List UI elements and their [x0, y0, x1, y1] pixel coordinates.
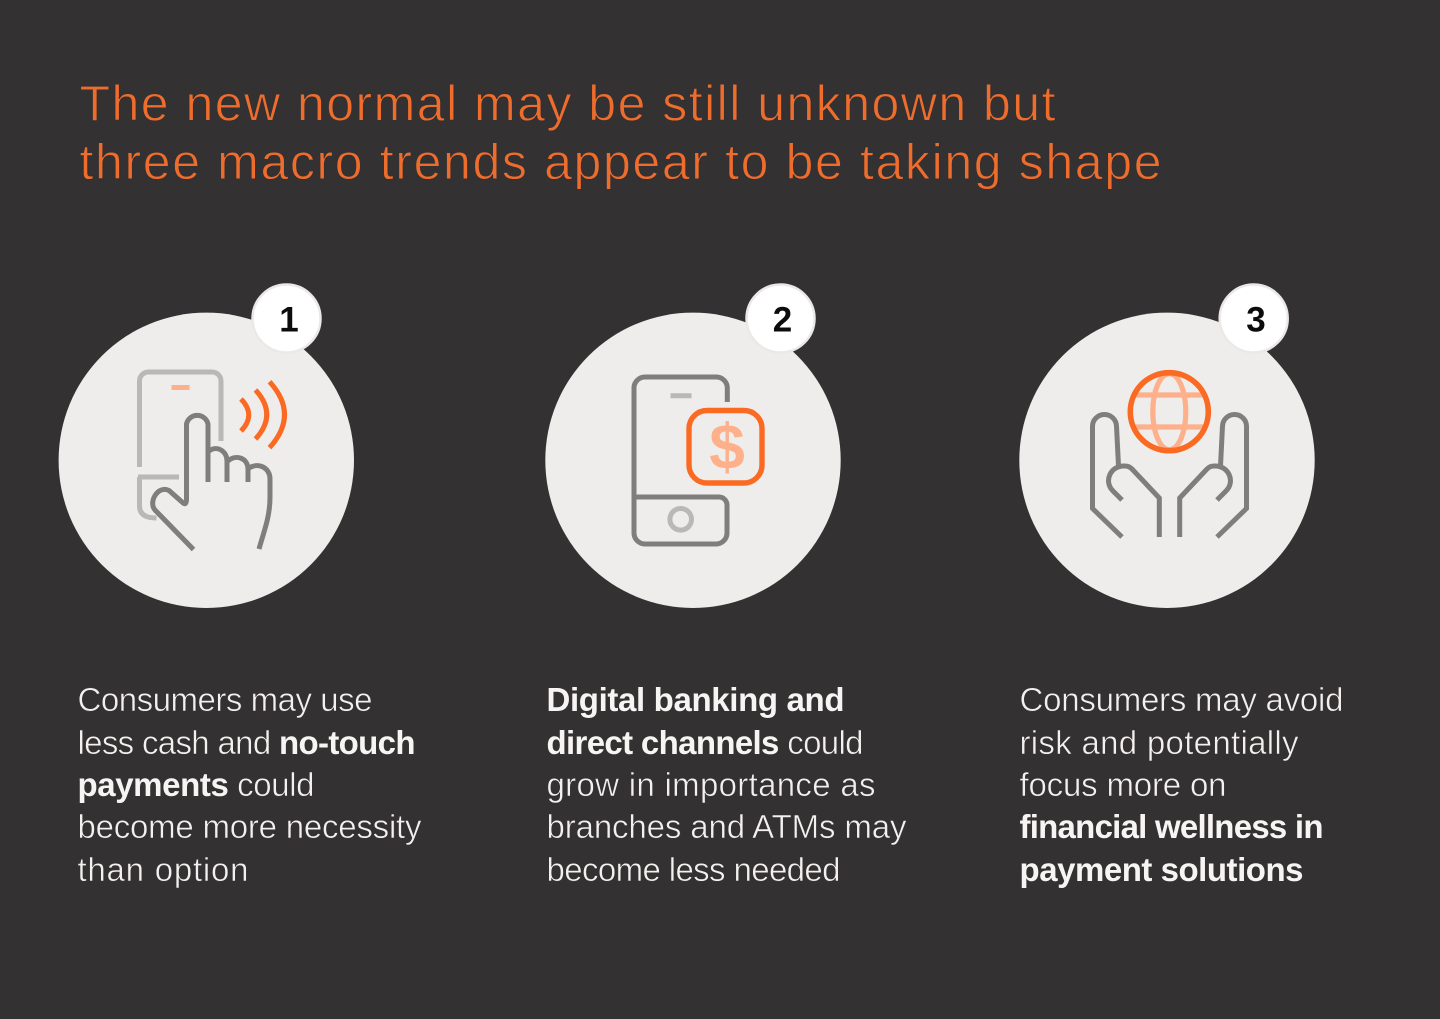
icon circle 2	[545, 313, 841, 608]
text: trend 1: than option	[78, 851, 248, 888]
text: trend 3: Consumers may avoid	[1020, 681, 1344, 718]
number badge 1: 1	[279, 300, 299, 340]
text: trend 1: less cash and no-touch	[78, 724, 416, 761]
number badge 3	[1220, 284, 1288, 352]
number badge 1	[252, 284, 320, 352]
icon: phone with dollar	[634, 377, 762, 544]
icon circle 1	[59, 313, 354, 608]
text: trend 1: become more necessity	[78, 808, 422, 845]
text: trend 2: branches and ATMs may	[546, 808, 907, 845]
title: The new normal may be still unknown but	[80, 76, 1056, 132]
text: trend 3: payment solutions	[1020, 851, 1304, 888]
text: trend 2: Digital banking and	[546, 681, 844, 718]
text: trend 2: direct channels could	[546, 724, 864, 761]
title: three macro trends appear to be taking shape	[80, 134, 1162, 190]
text: trend 2: grow in importance as	[546, 766, 876, 803]
text: trend 3	[1020, 681, 1344, 888]
text: trend 1: payments could	[78, 766, 314, 803]
text: trend 3: focus more on	[1020, 766, 1226, 803]
text: trend 1: Consumers may use	[78, 681, 372, 718]
icon: phone with dollar: $	[709, 410, 745, 482]
panel: trend 2	[545, 284, 907, 888]
title	[80, 76, 1162, 190]
text: trend 3: risk and potentially	[1020, 724, 1299, 761]
icon circle 3	[1019, 313, 1315, 608]
panel: trend 1	[59, 284, 422, 888]
panel: trend 3	[1019, 284, 1344, 888]
number badge 3: 3	[1246, 300, 1266, 340]
icon: hand tapping phone	[138, 372, 284, 550]
number badge 2	[746, 284, 814, 352]
text: trend 2	[546, 681, 907, 888]
text: trend 1	[78, 681, 422, 888]
icon: hands holding globe	[1092, 373, 1247, 537]
text: trend 2: become less needed	[546, 851, 840, 888]
text: trend 3: financial wellness in	[1020, 808, 1324, 845]
number badge 2: 2	[773, 300, 792, 340]
